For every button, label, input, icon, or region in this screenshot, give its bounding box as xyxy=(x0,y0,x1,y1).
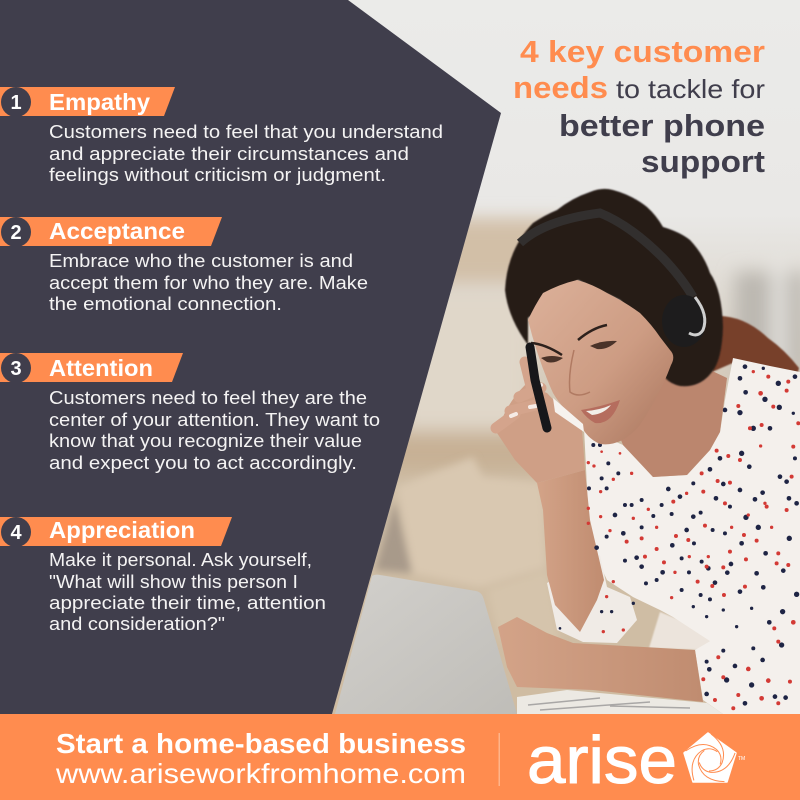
cushions xyxy=(375,457,560,640)
number 2 xyxy=(1,217,31,247)
right sleeve cuff xyxy=(695,590,800,714)
body 3 xyxy=(49,387,380,473)
heading Appreciation: Appreciation xyxy=(49,517,195,543)
arise logo: arise xyxy=(527,723,677,798)
heading Attention: Attention xyxy=(49,355,153,381)
blurred fabric behind arm xyxy=(649,612,715,650)
body 3: Customers need to feel they are the xyxy=(49,387,367,408)
number 4: 4 xyxy=(10,522,22,544)
title: needs xyxy=(513,70,608,105)
heading Acceptance: Acceptance xyxy=(49,218,185,244)
left forearm xyxy=(537,470,604,632)
banner 3 xyxy=(0,353,183,382)
right forearm and hand xyxy=(498,617,703,702)
title: to tackle for xyxy=(616,74,765,104)
item 1: Empathy xyxy=(0,87,443,185)
arise logo xyxy=(527,723,745,798)
eyebrows, eyes, mouth xyxy=(531,325,620,423)
banner 4 xyxy=(0,517,232,546)
title: 4 key customer xyxy=(520,34,765,69)
number 2: 2 xyxy=(10,222,22,244)
shirt dots xyxy=(559,364,800,710)
body 1: and appreciate their circumstances and xyxy=(49,143,409,164)
body 3: and expect you to act accordingly. xyxy=(49,452,357,473)
body 4: "What will show this person I xyxy=(49,571,298,592)
body 2: the emotional connection. xyxy=(49,293,282,314)
body 4: appreciate their time, attention xyxy=(49,592,326,613)
body 3: know that you recognize their value xyxy=(49,430,362,451)
banner 1 xyxy=(0,87,175,116)
neck xyxy=(615,350,727,477)
number 3: 3 xyxy=(10,358,22,380)
body 4 xyxy=(49,549,326,634)
body 1: feelings without criticism or judgment. xyxy=(49,164,386,185)
notebook xyxy=(517,690,723,714)
body 1 xyxy=(49,121,443,185)
body 4: Make it personal. Ask yourself, xyxy=(49,549,312,570)
hand holding phone xyxy=(496,362,585,483)
laptop xyxy=(335,575,517,714)
number 3 xyxy=(1,353,31,383)
item 3: Attention xyxy=(0,353,380,473)
headset mic and phone xyxy=(530,347,547,428)
auburn hair xyxy=(712,316,799,376)
icon: pentagon pinwheel xyxy=(684,733,739,789)
body 2: Embrace who the customer is and xyxy=(49,250,353,271)
footer text: Start a home-based business xyxy=(56,728,466,759)
left sleeve cuff xyxy=(547,555,637,643)
heading Empathy: Empathy xyxy=(49,89,150,115)
number 1 xyxy=(1,87,31,117)
arise logo: TM xyxy=(738,756,745,762)
footer text xyxy=(55,728,466,789)
photo: woman on phone headset at laptop xyxy=(300,0,800,714)
shirt torso xyxy=(584,358,800,643)
banner 2 xyxy=(0,217,222,246)
headband xyxy=(520,213,693,297)
earcup xyxy=(662,295,706,347)
face xyxy=(528,280,673,444)
body 2: accept them for who they are. Make xyxy=(49,272,368,293)
title xyxy=(513,34,765,179)
body 2 xyxy=(49,250,368,314)
mic collar xyxy=(553,398,584,432)
title: support xyxy=(641,144,765,179)
item 4: Appreciation xyxy=(0,517,326,634)
panel: dark angled background xyxy=(0,0,501,714)
footer bar xyxy=(0,714,800,800)
title: better phone xyxy=(559,108,765,143)
number 1: 1 xyxy=(10,92,22,114)
footer text: www.ariseworkfromhome.com xyxy=(55,758,466,789)
number 4 xyxy=(1,517,31,547)
body 4: and consideration?" xyxy=(49,613,225,634)
body 3: center of your attention. They want to xyxy=(49,409,380,430)
hair xyxy=(505,189,723,386)
body 1: Customers need to feel that you understand xyxy=(49,121,443,142)
item 2: Acceptance xyxy=(0,217,368,314)
